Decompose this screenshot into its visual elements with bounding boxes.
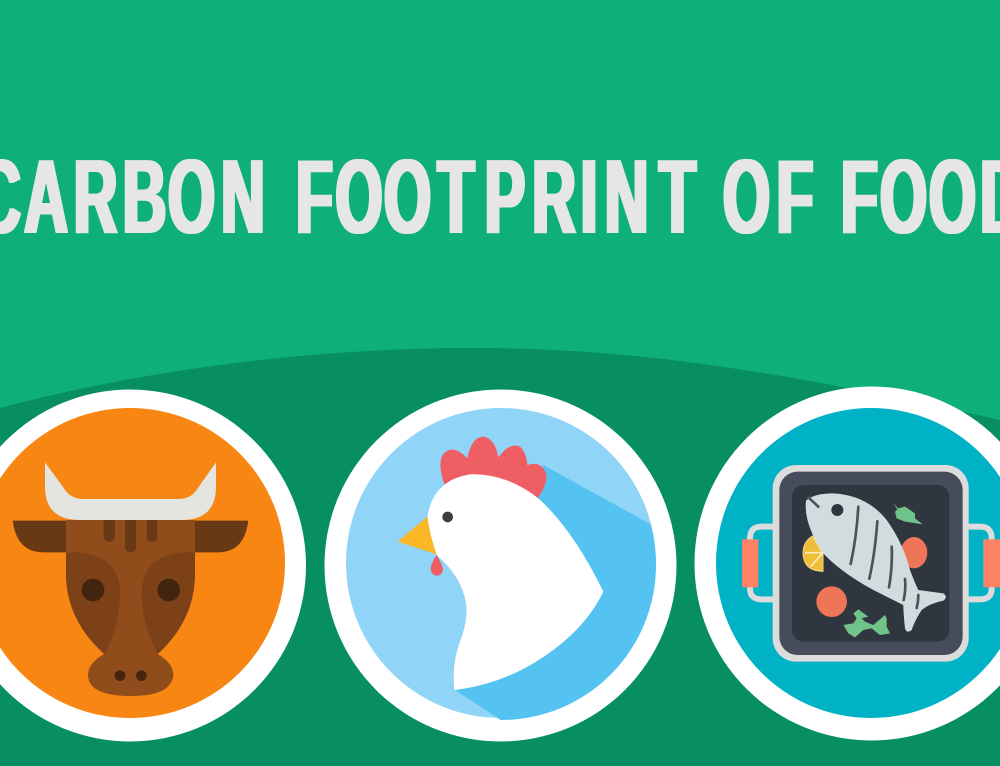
chicken wattle (431, 555, 443, 576)
beef badge disc (0, 408, 285, 718)
herb leaves (843, 503, 923, 637)
pan rim (773, 465, 969, 662)
cow right face patch (142, 552, 195, 654)
infographic canvas (0, 159, 1000, 766)
pan handle grips (742, 539, 1000, 587)
cow head (66, 520, 195, 696)
fish grill marks (808, 497, 918, 608)
cow left ear (13, 521, 67, 552)
chicken beak (398, 517, 437, 554)
cow right ear (194, 521, 248, 552)
fish badge disc (716, 408, 1000, 718)
beef badge ring (0, 390, 306, 742)
icon: chicken (398, 436, 656, 720)
fish body (806, 493, 946, 632)
pan base (792, 485, 949, 642)
chicken long shadow (455, 465, 656, 720)
lemon slice (803, 535, 823, 571)
fish eye (831, 504, 843, 516)
dark green hill (0, 348, 1000, 766)
chicken badge disc (346, 408, 656, 718)
pan wall (779, 472, 963, 655)
cow nostrils (115, 670, 147, 681)
panel: beef (0, 390, 306, 742)
icon: fish in pan (742, 465, 1000, 662)
fish badge ring (694, 386, 1000, 740)
chicken body (427, 474, 603, 690)
panel: fish (694, 386, 1000, 740)
tomato slices (816, 537, 927, 617)
panel: chicken (324, 390, 676, 747)
chicken eye (442, 512, 453, 522)
cow eyes (82, 579, 180, 601)
cow horns (45, 462, 216, 520)
cow left face patch (66, 552, 120, 654)
chicken badge ring (324, 390, 676, 742)
pan handles (750, 527, 992, 599)
cow forehead stripes (104, 520, 157, 552)
icon: cow (13, 462, 248, 696)
chicken comb (440, 437, 547, 498)
